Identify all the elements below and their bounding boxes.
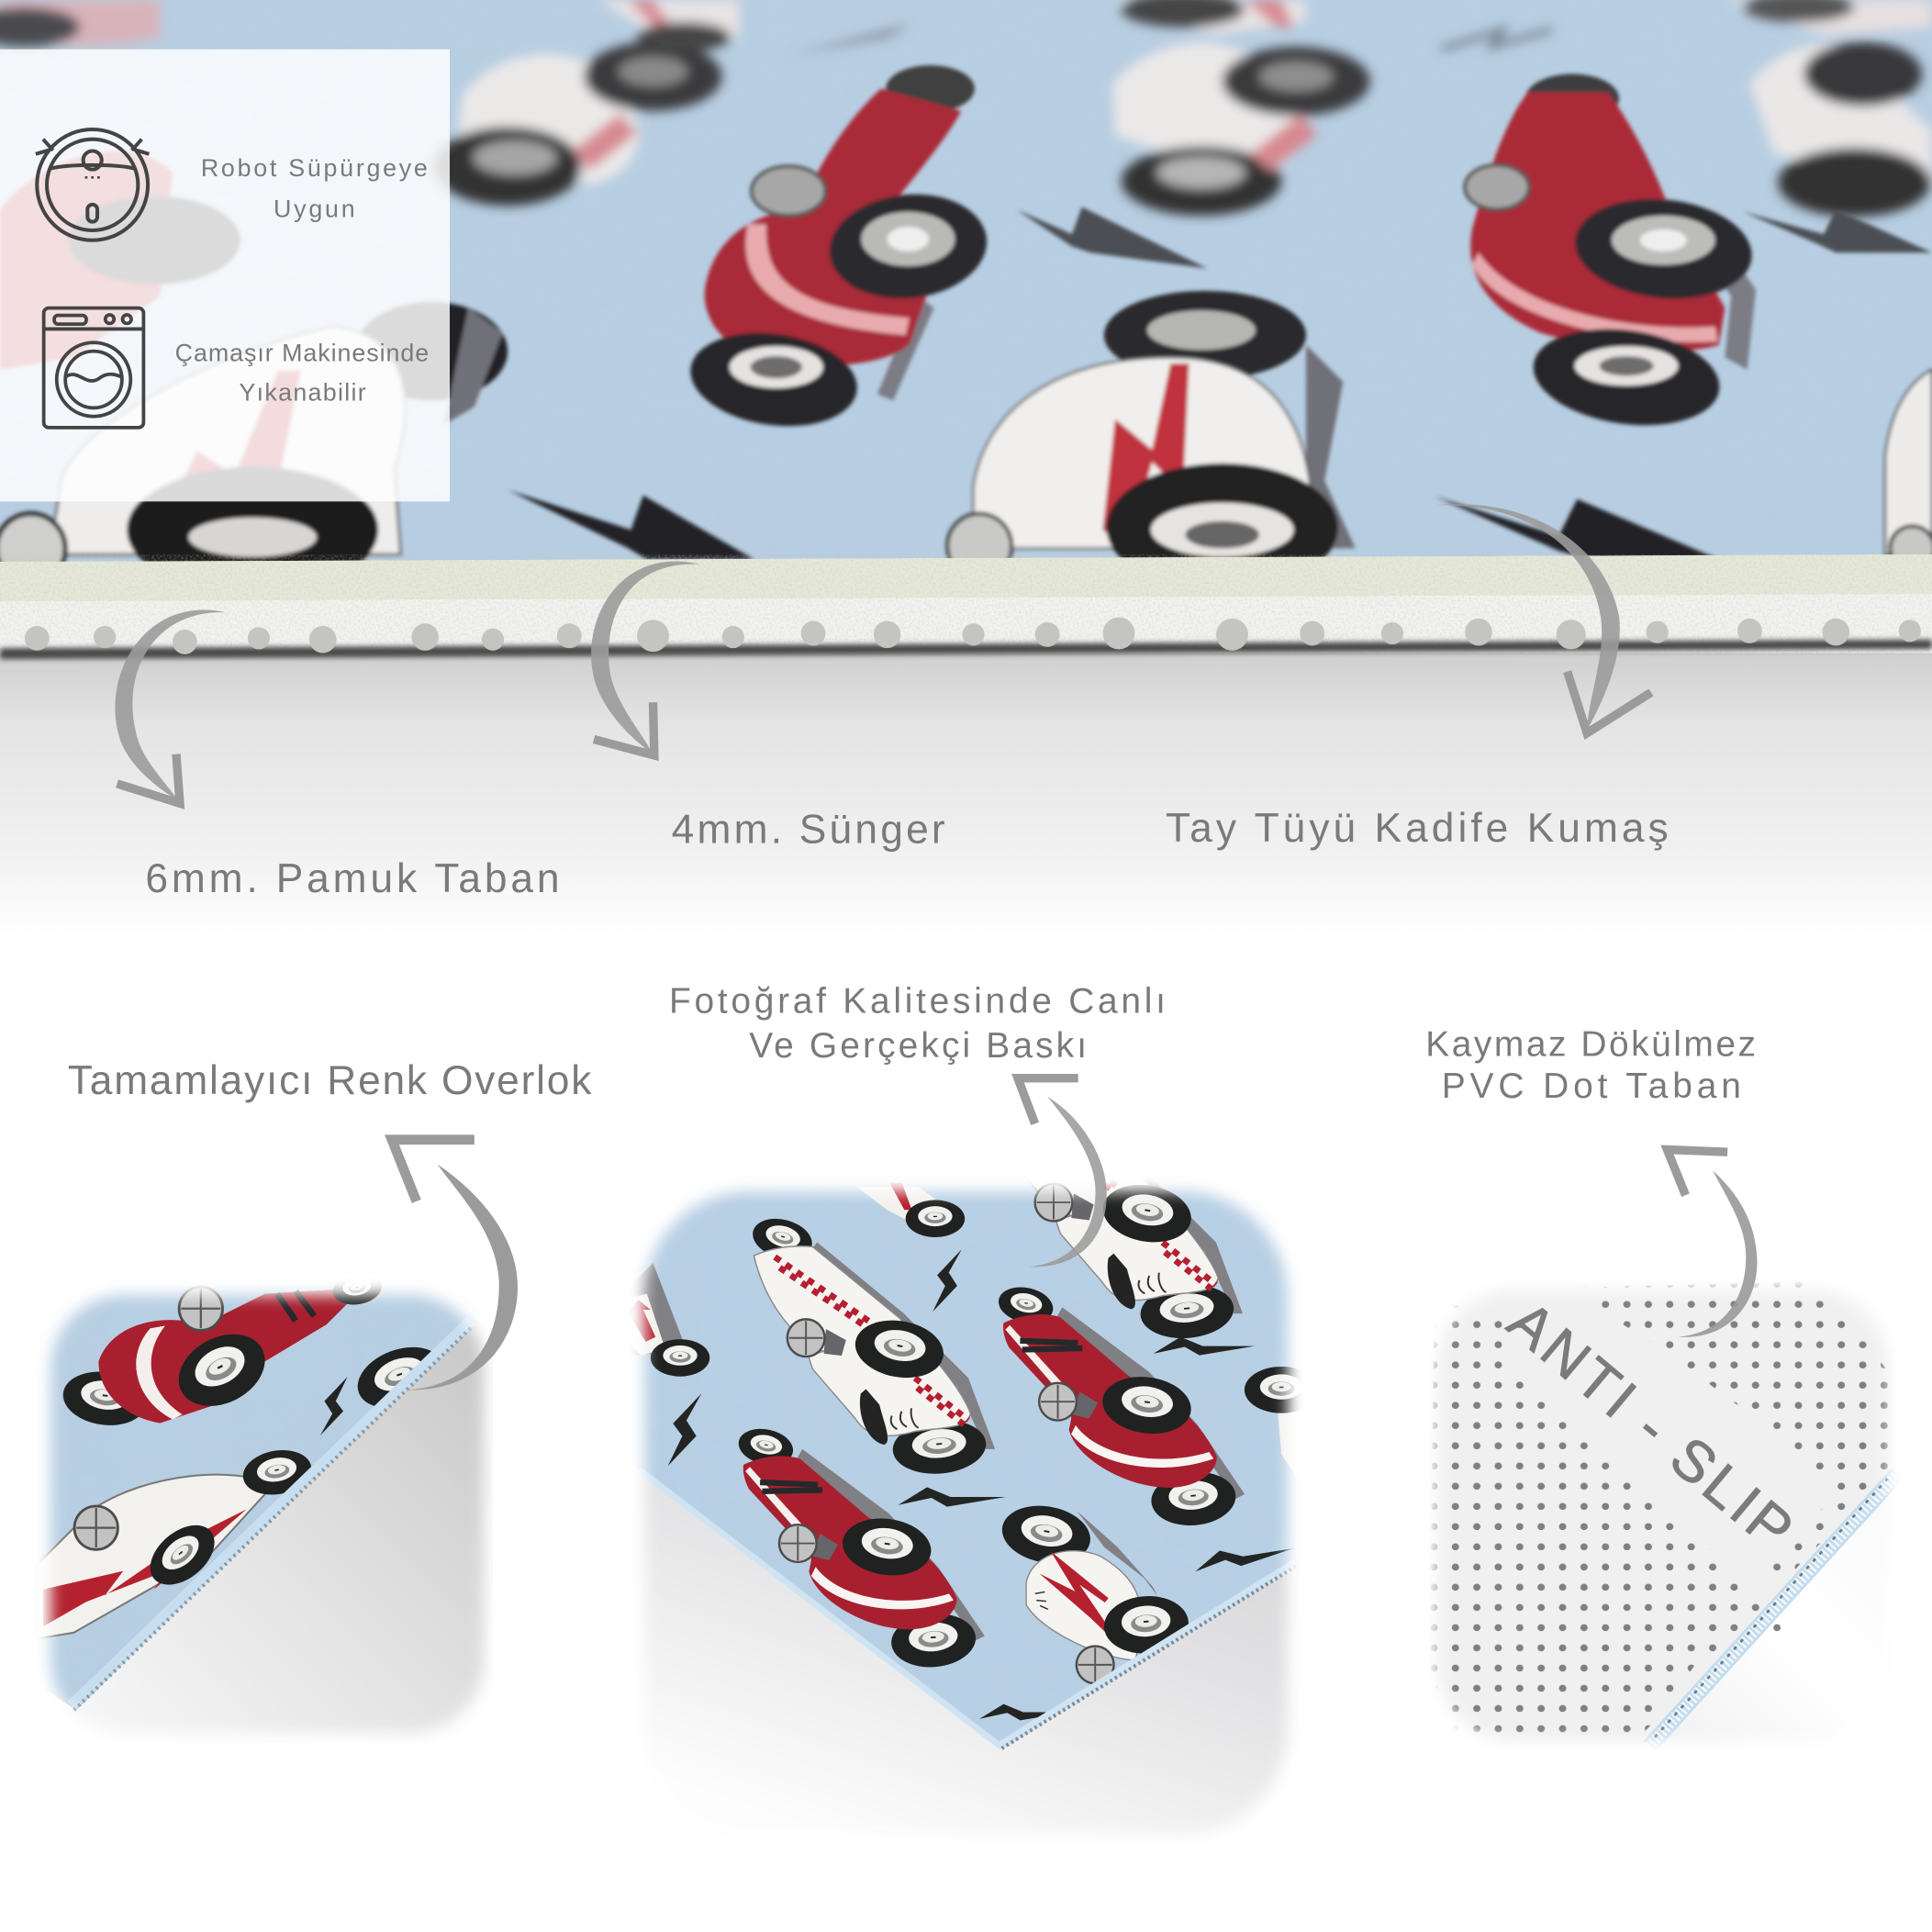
blurred back row of cars [0,0,1932,217]
heading: overlock: Tamamlayıcı Renk Overlok [68,1058,592,1103]
floor below rug edge [0,653,1932,936]
red car [62,1283,382,1425]
foam layer [0,594,1932,653]
overlock stitched edge [72,1321,471,1705]
arrow: foam [591,562,700,755]
lightning bolts [508,207,1932,559]
icon: robot vacuum [36,129,149,240]
partial wheel [358,1347,431,1406]
panel: care overlay [0,50,450,501]
stitched rug edge [640,1470,1296,1748]
overlock stitching [1648,1474,1897,1748]
red car two [995,1282,1245,1529]
pvc dots row [25,618,1921,654]
label: foam: 4mm. Sünger [672,807,945,852]
translucent card [0,50,450,501]
panel: top rug photo [0,0,1932,594]
arrow: print quality [1018,1078,1107,1267]
white checker car one [748,1212,995,1478]
bolts [668,1249,1296,1720]
label: velvet fabric: Tay Tüyü Kadife Kumaş [1166,806,1669,851]
arrow: overlock [392,1140,518,1390]
heading: non-slip base: PVC Dot Taban [1442,1067,1741,1106]
label: cotton base: 6mm. Pamuk Taban [145,856,559,901]
washing label: Yıkanabilir [239,378,366,406]
floor [641,1475,1293,1832]
grey dots lower [1429,1281,1897,1749]
floor [80,1318,492,1737]
right partial car [1245,1367,1318,1485]
red car right [1465,74,1757,437]
top white car fragment [856,1183,965,1237]
anti-slip lettering: ANTI - SLIP [1496,1289,1804,1562]
red car one [735,1424,985,1670]
heading: non-slip base: Kaymaz Dökülmez [1425,1025,1756,1065]
left white car fragment [622,1263,709,1377]
icon: washing machine [44,308,143,428]
rug surface [0,0,1932,567]
grey dots upper [1429,1281,1897,1749]
backing [1429,1281,1897,1749]
panel: overlock corner photo [25,1269,493,1744]
washing label: Çamaşır Makinesinde [175,339,429,366]
heading: print quality [669,982,1166,1066]
robot vacuum label [201,154,428,222]
heading: non-slip base [1425,1025,1756,1106]
rug corner [40,1283,466,1710]
heading: print quality: Fotoğraf Kalitesinde Canlı [669,982,1166,1022]
white lightning car [947,291,1932,591]
arrow: anti-slip [1667,1150,1758,1337]
floor [1429,1281,1897,1749]
dark base line [0,640,1932,659]
white checker car two [996,1077,1243,1342]
robot vacuum label: Robot Süpürgeye [201,154,428,182]
red car left [685,65,992,436]
lightning white car [998,1499,1190,1683]
rug corner [633,1178,1300,1742]
white car [37,1445,315,1638]
arrow: velvet fabric [1435,504,1651,733]
cars behind overlay [0,151,508,594]
heading: print quality: Ve Gerçekçi Baskı [749,1026,1087,1066]
arrow: cotton base [115,610,226,803]
panel: rug cross-section layers [0,554,1932,659]
panel: anti-slip backing photo [1429,1281,1897,1749]
washing label [175,339,429,406]
bolt [320,1377,348,1435]
panel: print quality corner photo [631,1178,1300,1832]
fabric backing layer [0,554,1932,604]
robot vacuum label: Uygun [274,195,355,222]
